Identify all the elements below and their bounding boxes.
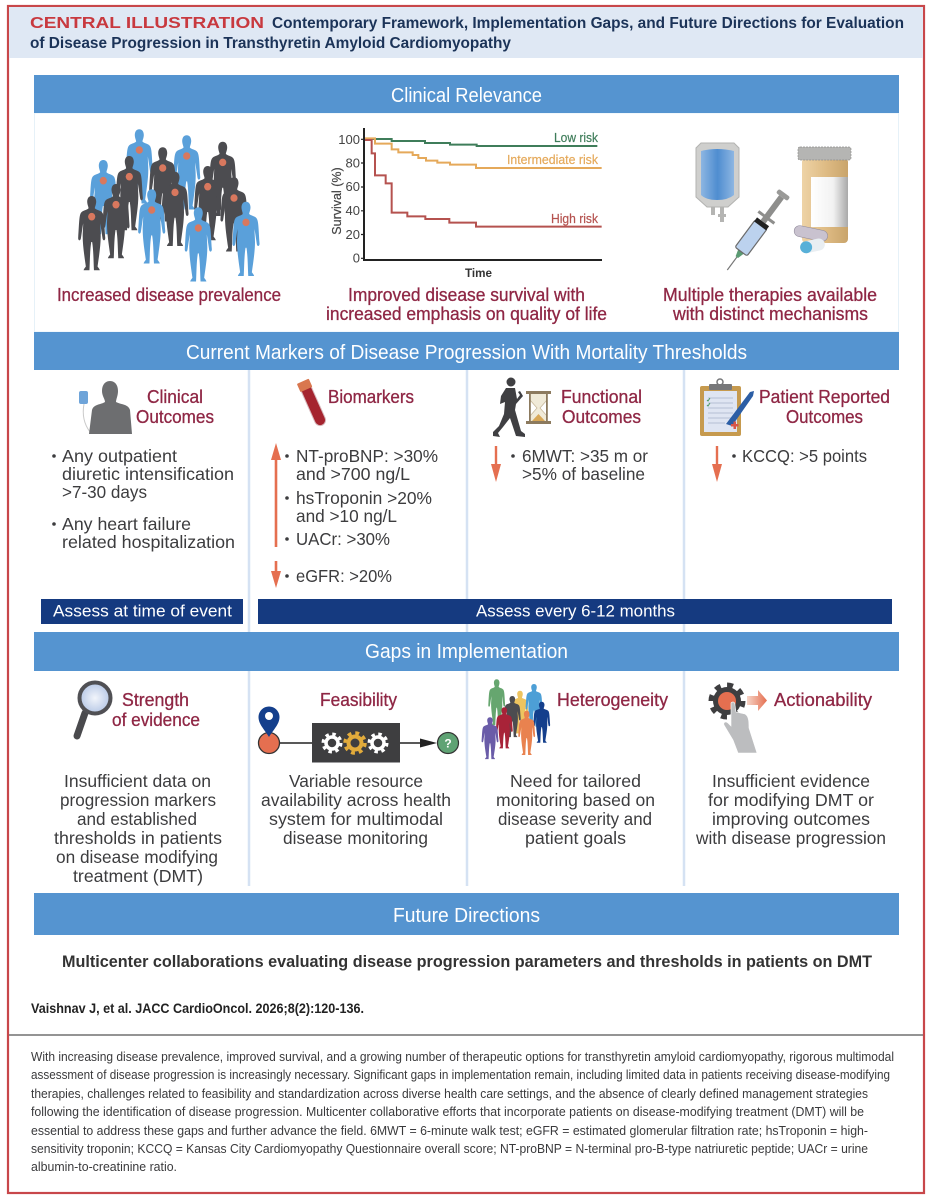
icon: blood tube (297, 379, 328, 428)
text: clinical outcomes list: Any outpatient (62, 446, 177, 466)
icon: IV bag (696, 143, 739, 222)
heading: heterogeneity: Heterogeneity (557, 690, 668, 710)
text: clinical outcomes list: >7-30 days (62, 482, 147, 502)
text: description and abbreviations: albumin-to-creatinine ratio. (31, 1160, 177, 1174)
text: functional list: 6MWT: >35 m or (522, 446, 648, 466)
text: biomarkers list: eGFR: >20% (296, 566, 392, 586)
text: strength of evidence: and established (77, 809, 197, 829)
text: biomarkers list: hsTroponin >20% (296, 488, 432, 508)
caption: survival: Improved disease survival with (348, 285, 585, 305)
text: feasibility: disease monitoring (283, 828, 428, 848)
text: functional list (511, 446, 648, 484)
text: clinical outcomes list: related hospitalization (62, 532, 235, 552)
survival chart: Intermediate risk (507, 152, 598, 167)
icon: syringe (719, 187, 793, 276)
text: clinical outcomes list (52, 446, 235, 552)
icon: diverse people (482, 679, 550, 759)
caption: therapies: with distinct mechanisms (672, 304, 868, 324)
text: description and abbreviations: therapies, challenges related to feasibility and standardization across diverse health care settings, and the absence of clearly defined management strategies (31, 1087, 868, 1101)
citation: Vaishnav J, et al. JACC CardioOncol. 2026;8(2):120-136. (31, 1001, 364, 1016)
heading: future directions (34, 893, 899, 935)
title (9, 7, 923, 58)
text: actionability: improving outcomes (712, 809, 870, 829)
title: Contemporary Framework, Implementation Gaps, and Future Directions for Evaluation (272, 15, 904, 32)
text: description and abbreviations: essential to address these gaps and further advance the field. 6MWT = 6-minute walk test; eGFR = estimated glomerular filtration rate; hsTroponin = high- (31, 1124, 868, 1138)
caption: survival: increased emphasis on quality of life (326, 304, 607, 324)
heading: gaps in implementation (34, 632, 899, 671)
text: functional list: >5% of baseline (522, 464, 645, 484)
survival chart: 80 (346, 156, 360, 170)
panel: gaps in implementation (34, 632, 899, 886)
text: actionability: for modifying DMT or (708, 790, 874, 810)
text: heterogeneity: patient goals (525, 828, 626, 848)
bar: assess at time of event (41, 599, 243, 624)
text: biomarkers list (285, 446, 438, 586)
heading: functional outcomes: Functional (561, 387, 642, 407)
caption: therapies (663, 285, 877, 324)
column dividers (249, 671, 684, 886)
icon: feasibility flow (258, 706, 458, 762)
text: feasibility (261, 771, 451, 848)
text: heterogeneity: monitoring based on (496, 790, 655, 810)
survival chart: 40 (346, 203, 360, 218)
icon: clipboard and pen (700, 379, 754, 436)
heading: strength of evidence (112, 690, 200, 730)
heading: current markers (34, 332, 899, 370)
heading: clinical outcomes: Clinical (147, 387, 203, 407)
heading: actionability: Actionability (774, 690, 872, 710)
text: clinical outcomes list: diuretic intensification (62, 464, 234, 484)
text: strength of evidence: on disease modifying (56, 847, 218, 867)
survival chart: 100 (338, 132, 360, 147)
heading: strength of evidence: of evidence (112, 710, 200, 730)
panel: future directions (34, 893, 899, 971)
panel: clinical relevance (34, 75, 899, 332)
survival chart (330, 128, 602, 280)
heading: functional outcomes (561, 387, 642, 427)
text: heterogeneity (496, 771, 655, 848)
text: heterogeneity: Need for tailored (510, 771, 641, 791)
text: biomarkers list: NT-proBNP: >30% (296, 446, 438, 466)
text: future directions statement: Multicenter collaborations evaluating disease progression parameters and thresholds in patients on DMT (62, 952, 873, 971)
icon: feasibility flow: ? (444, 736, 452, 750)
text: heterogeneity: disease severity and (498, 809, 652, 829)
arrow: down (271, 561, 281, 588)
title: of Disease Progression in Transthyretin Amyloid Cardiomyopathy (30, 35, 511, 52)
survival chart: High risk (551, 211, 598, 226)
title: CENTRAL ILLUSTRATION (30, 15, 264, 32)
heading: patient reported outcomes (759, 387, 890, 427)
heading: future directions: Future Directions (393, 905, 540, 927)
text: description and abbreviations: following the identification of disease progression. Multicenter collaborative efforts that incorporate patients on disease-modifying treatment (DMT) will be (31, 1105, 864, 1119)
icon: hourglass (526, 391, 551, 424)
bar: assess at time of event: Assess at time of event (53, 602, 232, 620)
text: strength of evidence: Insufficient data on (64, 771, 211, 791)
text: biomarkers list: and >10 ng/L (296, 506, 397, 526)
survival chart: Time (465, 266, 492, 280)
survival chart: 20 (346, 227, 360, 242)
text: actionability (695, 771, 886, 848)
heading: clinical outcomes: Outcomes (136, 407, 214, 427)
text: description and abbreviations: With increasing disease prevalence, improved survival, and a growing number of therapeutic options for transthyretin amyloid cardiomyopathy, rigorous multimodal (31, 1050, 894, 1064)
arrow: down (491, 446, 501, 482)
caption: prevalence: Increased disease prevalence (57, 285, 281, 305)
text: clinical outcomes list: Any heart failure (62, 514, 191, 534)
text: strength of evidence (54, 771, 222, 886)
text: strength of evidence: thresholds in patients (54, 828, 222, 848)
icon: patient with IV (79, 381, 132, 434)
heading: biomarkers: Biomarkers (328, 387, 414, 407)
text: description and abbreviations (31, 1050, 894, 1174)
heading: clinical outcomes (136, 387, 214, 427)
heading: strength of evidence: Strength (122, 690, 189, 710)
bar: assess every 6-12 months (258, 599, 892, 624)
text: strength of evidence: progression markers (60, 790, 216, 810)
heading: gaps in implementation: Gaps in Implementation (365, 641, 568, 663)
heading: functional outcomes: Outcomes (562, 407, 641, 427)
icon: pill bottle (793, 147, 851, 254)
survival chart: Low risk (554, 130, 598, 145)
survival chart: 0 (353, 250, 360, 266)
heading: feasibility: Feasibility (320, 690, 397, 710)
heading: clinical relevance: Clinical Relevance (391, 85, 542, 107)
text: biomarkers list: UACr: >30% (296, 529, 390, 549)
icon: crowd of people (78, 129, 260, 282)
text: description and abbreviations: sensitivity troponin; KCCQ = Kansas City Cardiomyopathy Questionnaire overall score; NT-proBNP = N-terminal pro-B-type natriuretic peptide; UACr = urine (31, 1142, 868, 1156)
arrow: up (271, 443, 281, 547)
text: actionability: with disease progression (695, 828, 886, 848)
text: feasibility: Variable resource (289, 771, 423, 791)
bar: assess every 6-12 months: Assess every 6-12 months (476, 602, 675, 620)
caption: therapies: Multiple therapies available (663, 285, 877, 305)
survival chart: 60 (346, 179, 360, 194)
text: actionability: Insufficient evidence (712, 771, 870, 791)
heading: patient reported outcomes: Outcomes (786, 407, 863, 427)
heading: current markers: Current Markers of Disease Progression With Mortality Thresholds (186, 342, 747, 364)
icon: runner (493, 378, 525, 437)
text: strength of evidence: treatment (DMT) (73, 866, 203, 886)
panel: current markers (34, 332, 899, 632)
text: patient reported list: KCCQ: >5 points (742, 446, 867, 466)
column dividers (249, 370, 684, 632)
text: feasibility: availability across health (261, 790, 451, 810)
heading: clinical relevance (34, 75, 899, 113)
icon: magnifying glass (77, 682, 110, 736)
text: description and abbreviations: assessment of disease progression is increasingly necessary. Significant gaps in implementation remain, including limited data in patients receiving disease-modifying (31, 1068, 890, 1082)
heading: patient reported outcomes: Patient Reported (759, 387, 890, 407)
icon: gear and hand (711, 685, 767, 753)
text: biomarkers list: and >700 ng/L (296, 464, 410, 484)
caption: survival (326, 285, 607, 324)
survival chart: Survival (%) (330, 167, 344, 235)
arrow: down (712, 446, 722, 482)
text: feasibility: system for multimodal (269, 809, 443, 829)
